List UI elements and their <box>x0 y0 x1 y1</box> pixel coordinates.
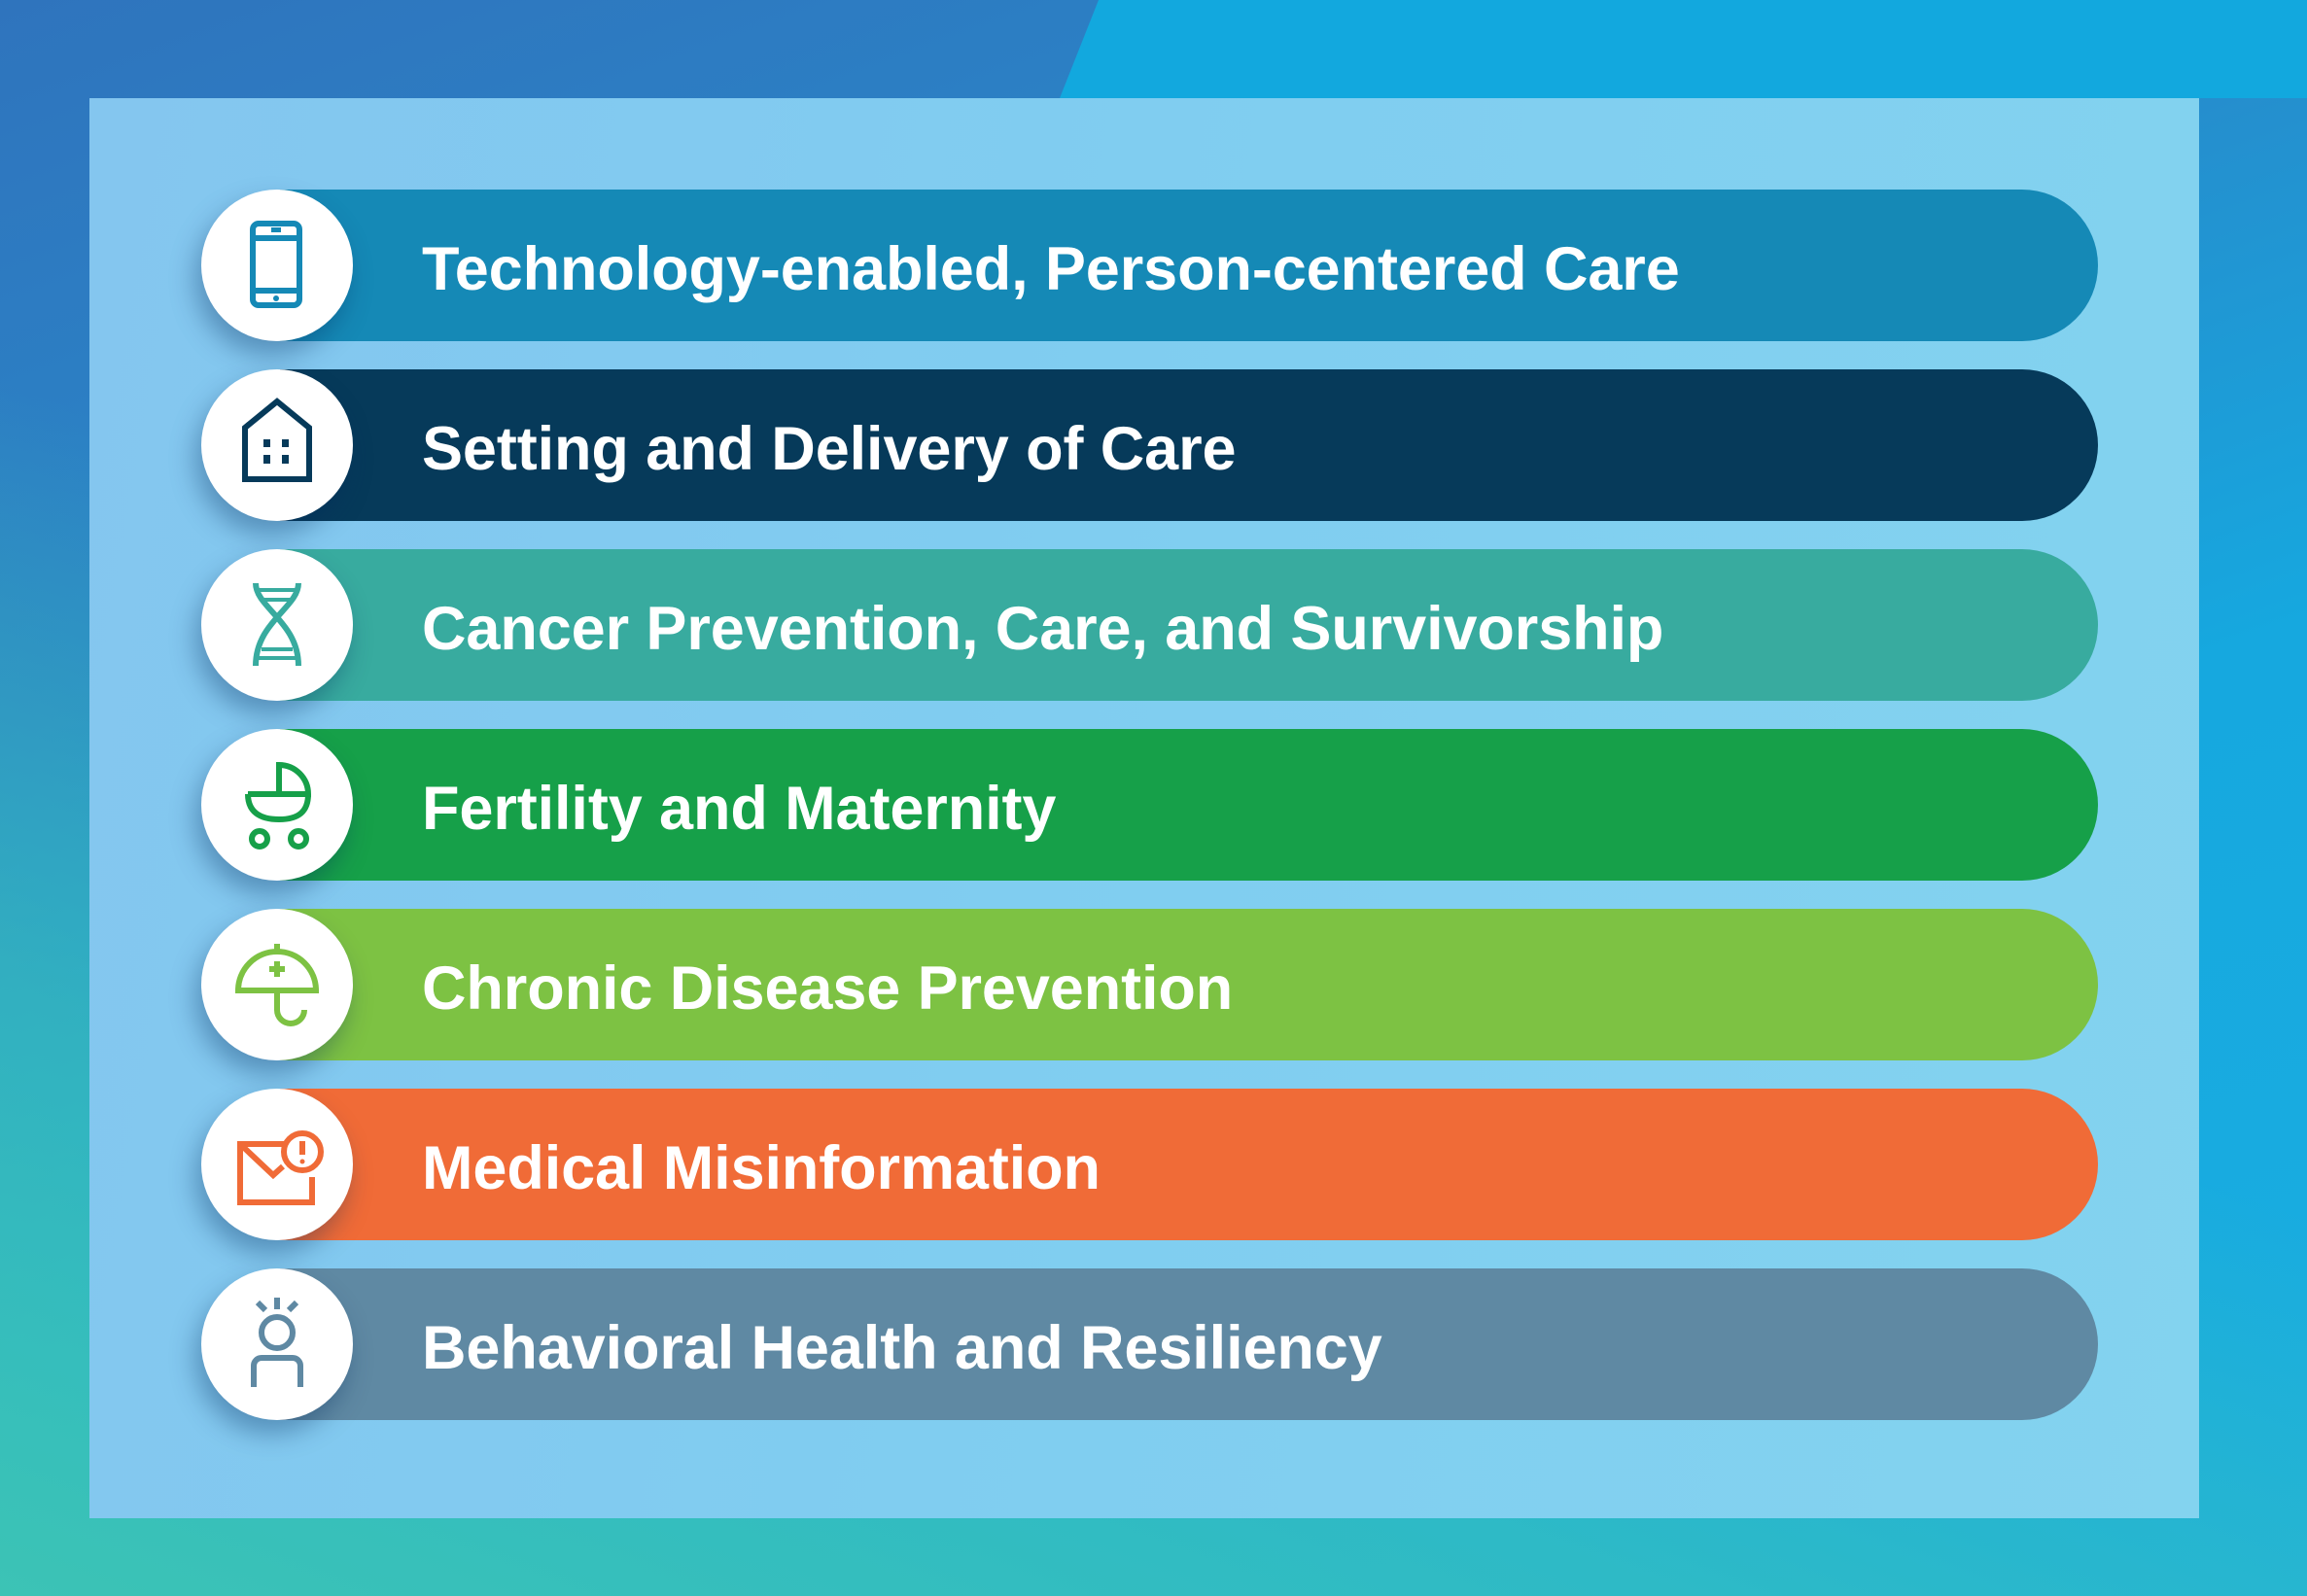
bar: Medical Misinformation <box>280 1089 2098 1240</box>
icon: house <box>201 369 353 521</box>
bar: Chronic Disease: Chronic Disease Prevention <box>422 954 1233 1023</box>
bar: Behavioral Health <box>280 1268 2098 1420</box>
icon: person <box>201 1268 353 1420</box>
bar: Fertility: Fertility and Maternity <box>422 775 1056 843</box>
icon: umbrella <box>201 909 353 1060</box>
bar: Cancer <box>280 549 2098 701</box>
bar: Medical Misinformation: Medical Misinformation <box>422 1134 1101 1202</box>
icon: envelope alert <box>201 1089 353 1240</box>
bar: Chronic Disease <box>280 909 2098 1060</box>
bar: Behavioral Health: Behavioral Health and Resiliency <box>422 1314 1382 1382</box>
bar: Fertility <box>280 729 2098 881</box>
bar: Technology-enabled <box>280 190 2098 341</box>
icon: stroller <box>201 729 353 881</box>
bar: Cancer: Cancer Prevention, Care, and Survivorship <box>422 595 1663 663</box>
bar: Technology-enabled: Technology-enabled, Person-centered Care <box>422 235 1680 303</box>
icon: DNA <box>201 549 353 701</box>
bar: Setting and Delivery <box>280 369 2098 521</box>
icon: phone <box>201 190 353 341</box>
bar: Setting and Delivery: Setting and Delivery of Care <box>422 415 1236 483</box>
